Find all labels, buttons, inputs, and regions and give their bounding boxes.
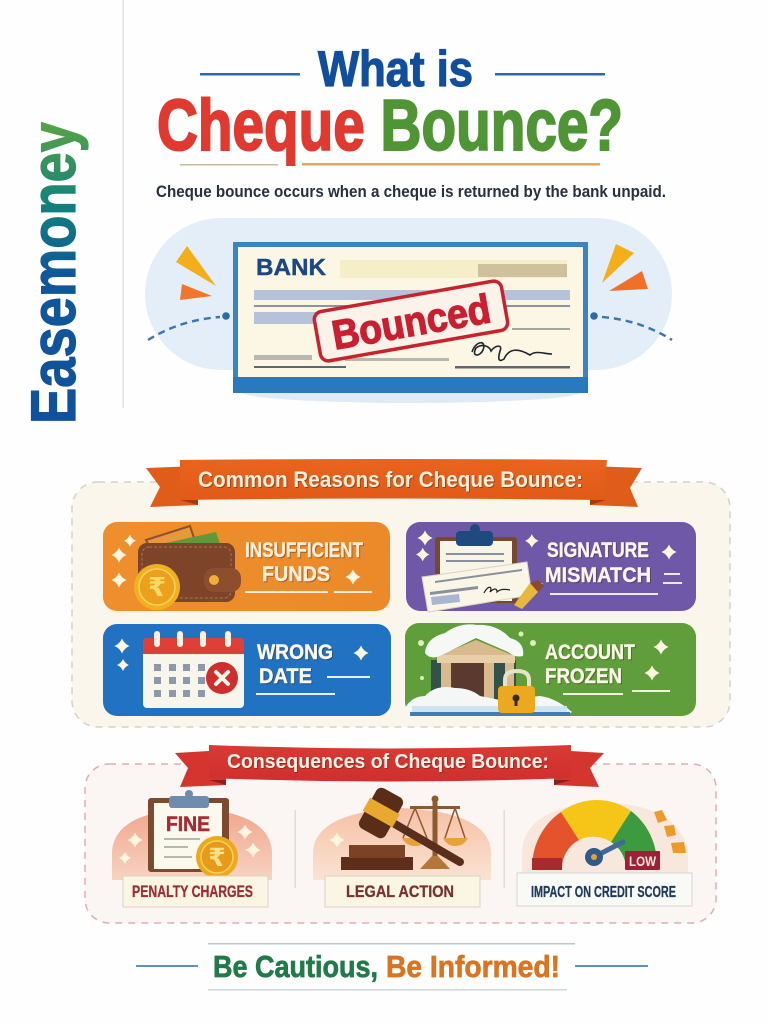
- brand rule: [122, 0, 124, 408]
- icon: wallet with rupee coin: ₹: [148, 572, 166, 602]
- subtitle: Cheque bounce occurs when a cheque is returned by the bank unpaid.: [156, 182, 666, 201]
- label rules: [550, 573, 682, 595]
- footer rule top: [208, 943, 575, 944]
- label: IMPACT ON CREDIT SCORE: [531, 884, 676, 901]
- title underline: [180, 163, 600, 166]
- cheque fields: [254, 260, 570, 368]
- icon: frozen bank with padlock: [405, 624, 572, 716]
- label: [545, 539, 651, 587]
- label plate: [517, 873, 692, 906]
- dome: [522, 802, 688, 880]
- footer tagline: [136, 943, 648, 990]
- panel: consequences: [85, 745, 716, 923]
- footer rule right: [575, 965, 648, 967]
- card: signature mismatch: [406, 522, 696, 612]
- sparkles: [114, 638, 368, 671]
- brand name: Easemoney: Easemoney: [19, 122, 89, 424]
- sparkles: [119, 824, 260, 864]
- cheque frame: [233, 242, 588, 393]
- item: legal action: [313, 785, 491, 907]
- item: impact on credit score: [517, 800, 692, 906]
- label plate: [325, 876, 480, 907]
- label: LEGAL ACTION: [346, 882, 454, 901]
- panel background: [72, 482, 730, 727]
- tagline orange: Be Informed!: [386, 949, 560, 984]
- label: WRONG: [257, 641, 333, 664]
- card: wrong date: [103, 624, 391, 716]
- cheque glow: [241, 381, 581, 403]
- burst right: [602, 244, 648, 291]
- icon: credit gauge: LOW: [629, 853, 657, 869]
- panel background: [85, 764, 716, 923]
- icon: calendar with cross: [143, 631, 244, 708]
- card background: [103, 624, 391, 716]
- tagline green: Be Cautious,: [213, 949, 378, 984]
- sparkle: [330, 832, 344, 848]
- dome: [313, 808, 491, 880]
- cheque band: [233, 377, 588, 393]
- title rule right: [495, 73, 605, 76]
- ribbon: [146, 459, 642, 507]
- label: DATE: [259, 665, 312, 688]
- icon: credit gauge: [532, 800, 660, 870]
- label: SIGNATURE: [547, 539, 649, 562]
- signature: [472, 343, 552, 360]
- label: [545, 641, 635, 688]
- icon: fine clipboard and coin: [148, 790, 238, 878]
- dome: [112, 808, 272, 880]
- label: INSUFFICIENT: [245, 539, 363, 562]
- cheque illustration: [145, 218, 672, 403]
- sparkles: [112, 535, 360, 588]
- sparkles: [416, 530, 676, 561]
- label: [257, 641, 333, 688]
- cheque paper: [238, 247, 583, 377]
- label: MISMATCH: [545, 564, 651, 587]
- label rules: [245, 591, 372, 593]
- dotted arc left: [148, 312, 230, 340]
- ribbon: [175, 745, 604, 787]
- card background: [406, 522, 696, 611]
- dotted arc right: [590, 312, 672, 340]
- card: account frozen: [405, 623, 696, 716]
- card background: [405, 623, 696, 716]
- icon: scales: [402, 796, 468, 869]
- label rules: [256, 676, 370, 695]
- backdrop blob: [145, 218, 672, 370]
- burst left: [176, 246, 216, 300]
- icon: fine clipboard and coin: FINE: [166, 813, 210, 836]
- footer rule bottom: [208, 989, 567, 990]
- footer rule left: [136, 965, 198, 967]
- ribbon heading: Common Reasons for Cheque Bounce:: [198, 467, 583, 492]
- icon: fine clipboard and coin: ₹: [208, 844, 226, 872]
- bank name: BANK: [256, 254, 326, 280]
- label: ACCOUNT: [545, 641, 635, 664]
- card: insufficient funds: [103, 522, 390, 611]
- gauge ticks: [654, 810, 686, 853]
- title line: Cheque Bounce: Cheque Bounce?: [157, 86, 623, 166]
- ribbon heading: Consequences of Cheque Bounce:: [227, 751, 549, 773]
- stamp: Bounced: Bounced: [328, 285, 494, 359]
- label rules: [563, 690, 670, 695]
- label: PENALTY CHARGES: [132, 882, 253, 901]
- icon: clipboard and cheque: [422, 524, 544, 612]
- label: FROZEN: [545, 665, 622, 688]
- title block: [157, 41, 623, 166]
- item: penalty charges: [112, 790, 272, 907]
- column dividers: [294, 810, 505, 888]
- panel: common reasons: [72, 459, 730, 727]
- icon: gavel and block: [341, 785, 460, 870]
- card background: [103, 522, 390, 611]
- sparkles: [418, 632, 668, 680]
- label: FUNDS: [262, 563, 330, 586]
- label plate: [123, 876, 268, 907]
- icon: wallet with rupee coin: [134, 526, 241, 610]
- label: [245, 539, 363, 586]
- title rule left: [200, 73, 300, 76]
- title line: What is: What is: [318, 41, 473, 97]
